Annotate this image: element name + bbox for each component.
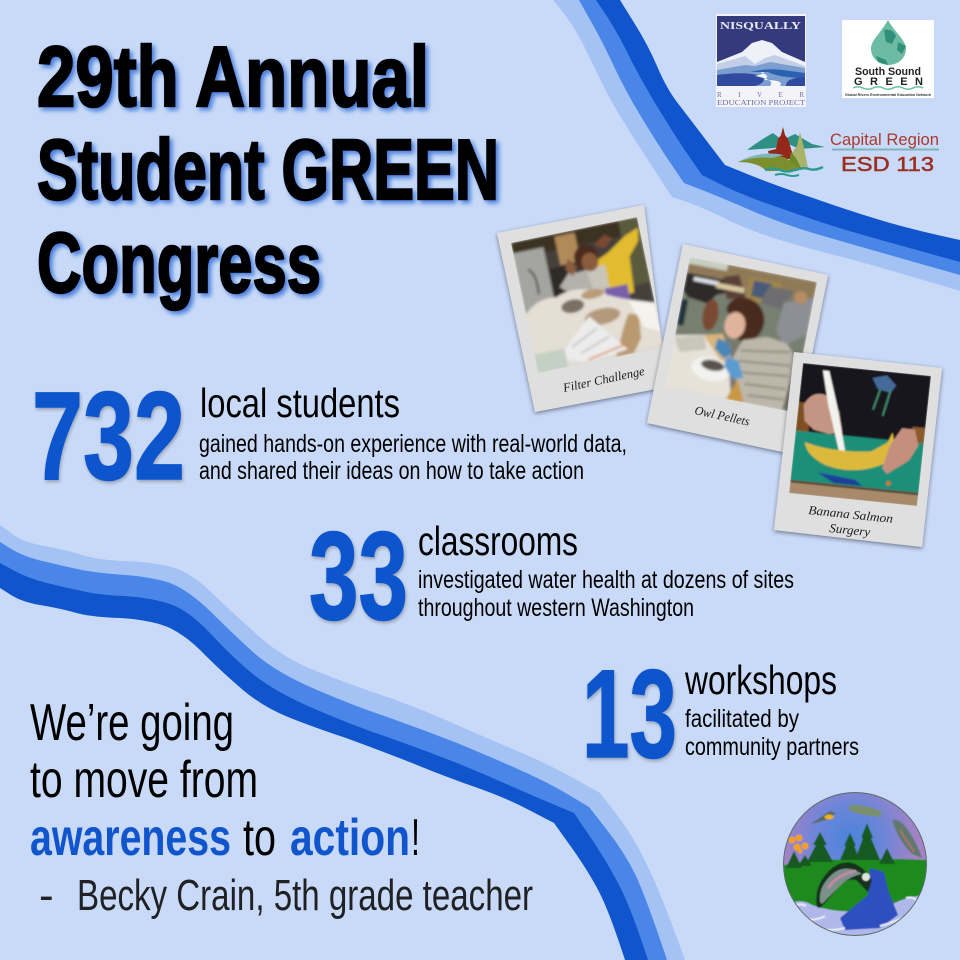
logo subtitle: R I V E R	[717, 91, 804, 99]
caption	[808, 503, 894, 539]
caption: Filter Challenge	[561, 364, 646, 395]
quote	[30, 694, 420, 867]
quote attribution: -	[39, 871, 54, 920]
quote: !	[411, 809, 420, 867]
caption: Surgery	[829, 521, 871, 539]
title: 29th Annual	[37, 30, 429, 125]
title: Congress	[37, 216, 321, 311]
logo: salmon circle	[780, 790, 930, 940]
description: gained hands-on experience with real-world data,	[199, 430, 627, 458]
logo name: NISQUALLY	[720, 21, 802, 32]
caption: Owl Pellets	[693, 403, 751, 429]
logo subtitle: EDUCATION PROJECT	[717, 98, 805, 107]
title: Student GREEN	[37, 123, 499, 218]
logo text: ESD 113	[841, 154, 934, 176]
icon: water drop globe	[871, 20, 906, 65]
quote: awareness	[30, 809, 231, 867]
logo text	[830, 130, 939, 176]
description: facilitated by	[685, 705, 799, 733]
logo name: G R E E N	[854, 76, 923, 88]
description	[685, 705, 859, 761]
icon: capitol and mountains	[738, 127, 825, 176]
number: 732	[32, 367, 185, 506]
description	[418, 566, 794, 622]
logo text: Capital Region	[830, 130, 939, 149]
photo: Banana Salmon Surgery polaroid	[774, 352, 942, 547]
heading: classrooms	[418, 518, 578, 564]
stat: 33 classrooms	[309, 507, 794, 646]
logo name: Global Rivers Environmental Education Network	[845, 93, 931, 97]
logo name: South Sound	[855, 66, 921, 78]
quote: to	[243, 809, 276, 867]
logo: Nisqually River Education Project	[716, 14, 806, 107]
photo: Filter Challenge polaroid	[497, 205, 667, 412]
title	[37, 30, 499, 311]
logo subtitle	[717, 91, 805, 107]
number: 33	[309, 507, 408, 646]
photo: Owl Pellets polaroid	[647, 244, 828, 454]
river: top right	[553, 0, 960, 291]
heading: local students	[200, 380, 400, 426]
stat: 732 local students	[32, 367, 627, 506]
logo: South Sound GREEN	[842, 20, 934, 98]
image	[511, 217, 664, 373]
caption: Banana Salmon	[808, 503, 894, 526]
quote: action	[290, 809, 410, 867]
stat: 13 workshops	[582, 645, 859, 784]
image	[789, 363, 931, 506]
heading: workshops	[684, 657, 837, 703]
description: investigated water health at dozens of sites	[418, 566, 794, 594]
quote: to move from	[30, 751, 258, 809]
description: throughout western Washington	[418, 594, 694, 622]
description: and shared their ideas on how to take action	[199, 457, 584, 485]
quote: We’re going	[30, 694, 234, 752]
description: community partners	[685, 733, 859, 761]
number: 13	[582, 645, 677, 784]
river: bottom left	[0, 525, 685, 960]
logo: Capital Region ESD 113	[738, 127, 939, 176]
quote attribution: Becky Crain, 5th grade teacher	[77, 871, 533, 920]
description	[199, 430, 627, 485]
image	[665, 257, 817, 412]
logo name	[845, 66, 931, 97]
